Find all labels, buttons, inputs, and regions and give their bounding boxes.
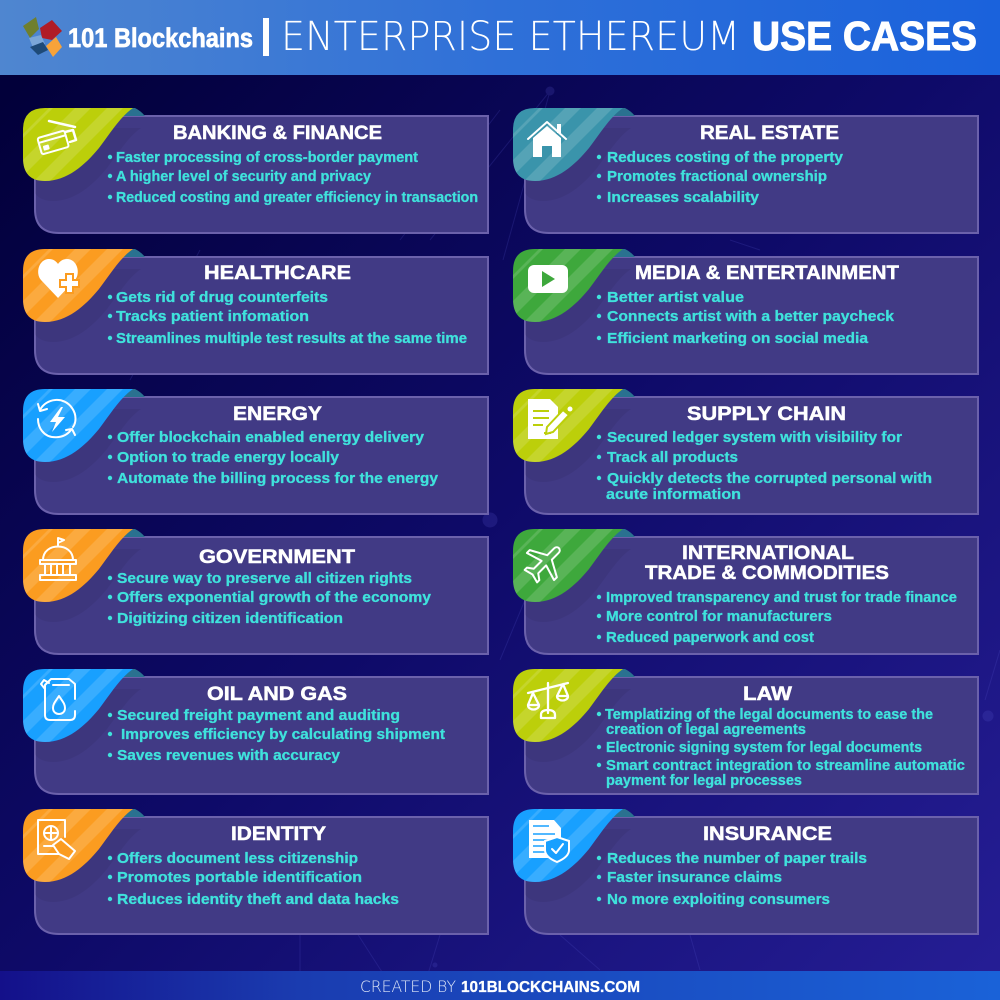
bullet list: Saves revenues with accuracy [117,748,340,764]
panel: oil and gas [13,659,488,794]
title: ENTERPRISE ETHEREUM [281,14,740,60]
heading: IDENTITY [231,823,326,845]
bullet list [108,150,478,206]
bullet list [108,708,445,764]
bullet list: Automate the billing process for the energy [117,471,438,487]
bullet list: creation of legal agreements [606,722,806,738]
logo wordmark: 101 Blockchains [68,23,253,53]
icon: fuel canister [41,679,75,720]
bullet list [597,430,932,503]
bullet list: Reduces the number of paper trails [607,851,867,867]
bullet list: Reduced paperwork and cost [606,630,814,646]
heading: TRADE & COMMODITIES [645,562,889,584]
footer credit: 101BLOCKCHAINS.COM [461,979,640,996]
title: USE CASES [752,13,977,59]
bullet list: Secure way to preserve all citizen rights [117,571,412,587]
bullet list [108,851,399,908]
bullet list: Smart contract integration to streamline automatic [606,758,965,774]
bullet list: Gets rid of drug counterfeits [116,290,328,306]
icon: document and shield [529,820,569,862]
bullet list [597,590,957,646]
bullet list: More control for manufacturers [606,609,832,625]
heading: HEALTHCARE [204,262,351,284]
panel: identity [13,799,488,934]
bullet list [597,851,867,908]
panel: law [503,659,978,794]
bullet list: Faster insurance claims [607,870,782,886]
heading: ENERGY [233,403,322,425]
bullet list: Efficient marketing on social media [607,331,869,347]
icon: airplane [517,535,572,590]
icon: passport in hand [38,820,75,859]
bullet list: Promotes fractional ownership [607,169,827,185]
logo cubes [23,17,62,57]
bullet list [108,430,438,487]
network pattern [130,87,1000,1000]
bullet list: Reduces costing of the property [607,150,843,166]
heading: OIL AND GAS [207,683,347,705]
bullet list: Offers exponential growth of the economy [117,590,431,606]
bullet list: Tracks patient infomation [116,309,309,325]
panel: energy [13,379,488,514]
bullet list: Digitizing citizen identification [117,611,343,627]
bullet list: Offer blockchain enabled energy delivery [117,430,424,446]
bullet list: Track all products [607,450,738,466]
heading: GOVERNMENT [199,546,355,568]
heading: SUPPLY CHAIN [687,403,846,425]
icon: government building [40,538,76,580]
footer credit: CREATED BY [360,977,456,996]
panel: banking and finance [13,98,488,233]
panel: international trade and commodities [503,519,978,654]
panel: supply chain [503,379,978,514]
heading: INSURANCE [703,823,832,845]
bullet list: Promotes portable identification [117,870,362,886]
bullet list: Improves efficiency by calculating shipment [121,727,445,743]
bullet list: Connects artist with a better paycheck [607,309,895,325]
heading [645,542,889,584]
bullet list: Improved transparency and trust for trade finance [606,590,957,606]
icon: scales of justice [528,683,568,718]
heading: LAW [743,683,793,705]
bullet list: Quickly detects the corrupted personal with [607,471,932,487]
bullet list: No more exploiting consumers [607,892,830,908]
bullet list: acute information [606,487,741,503]
bullet list: Better artist value [607,290,744,306]
bullet list: Streamlines multiple test results at the same time [116,331,467,347]
title [281,13,977,60]
bullet list: Offers document less citizenship [117,851,358,867]
heading: INTERNATIONAL [682,542,854,564]
heading: MEDIA & ENTERTAINMENT [635,262,899,284]
bullet list: payment for legal processes [606,773,802,789]
icon: house [528,122,566,157]
bullet list [597,707,965,789]
bullet list: Secured freight payment and auditing [117,708,400,724]
icon: credit cards [37,121,76,155]
bullet list [108,290,467,347]
title divider [263,18,269,56]
panel: real estate [503,98,978,233]
bullet list: Reduces identity theft and data hacks [117,892,399,908]
bullet list [597,290,895,347]
footer bar [0,971,1000,1000]
panel: media and entertainment [503,239,978,374]
bullet list: Reduced costing and greater efficiency in transaction [116,190,478,206]
bullet list: Increases scalability [607,190,759,206]
bullet list: Electronic signing system for legal documents [606,740,922,756]
panel: government [13,519,488,654]
bullet list: Option to trade energy locally [117,450,339,466]
footer credit [360,977,640,996]
heading: REAL ESTATE [700,122,839,144]
header bar [0,0,1000,75]
icon: document and pen [528,399,572,439]
bullet list: Templatizing of the legal documents to ease the [605,707,933,723]
panel: insurance [503,799,978,934]
panel: healthcare [13,239,488,374]
bullet list: A higher level of security and privacy [116,169,371,185]
bullet list: Faster processing of cross-border payment [116,150,418,166]
bullet list [597,150,843,206]
icon: energy cycle [38,400,76,437]
icon: heart with cross [38,259,79,298]
heading: BANKING & FINANCE [173,122,382,144]
icon: play button [528,265,568,293]
bullet list [108,571,431,627]
bullet list: Secured ledger system with visibility for [607,430,902,446]
